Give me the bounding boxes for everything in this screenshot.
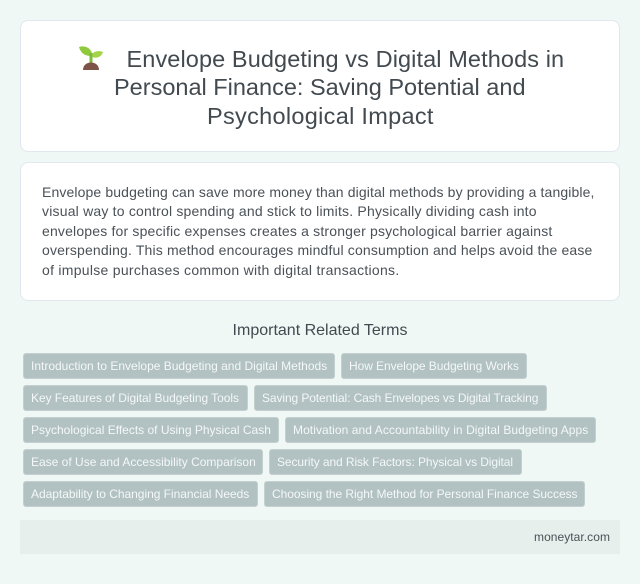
panel: summary text: envelopes for specific expenses creates a stronger psychological barrier against — [42, 223, 552, 239]
panel: term tags: Motivation and Accountability in Digital Budgeting Apps — [293, 423, 588, 437]
panel: term tags — [23, 353, 596, 507]
footer: source — [20, 520, 620, 554]
panel: summary text: overspending. This method encourages mindful consumption and helps avoid the ease — [42, 242, 592, 258]
panel: term tags: Adaptability to Changing Financial Needs — [31, 487, 249, 501]
panel: term tags: Choosing the Right Method for Personal Finance Success — [272, 487, 577, 501]
panel: summary text: Envelope budgeting can save more money than digital methods by providing a tangible, — [42, 184, 595, 200]
panel: term tags: Psychological Effects of Using Physical Cash — [31, 423, 271, 437]
icon: seedling — [79, 46, 103, 70]
panel: title card — [20, 20, 620, 152]
panel: term tags: Saving Potential: Cash Envelopes vs Digital Tracking — [262, 391, 538, 405]
panel: term tags: Ease of Use and Accessibility Comparison — [31, 455, 256, 469]
panel: term tags: How Envelope Budgeting Works — [349, 359, 519, 373]
heading: related terms: Important Related Terms — [233, 322, 407, 339]
panel: summary text: visual way to control spending and stick to limits. Physically dividing cash into — [42, 203, 537, 219]
title: Psychological Impact — [207, 103, 434, 129]
panel: term tags: Security and Risk Factors: Physical vs Digital — [277, 455, 513, 469]
panel: summary text: of impulse purchases common with digital transactions. — [42, 262, 400, 278]
panel: term tags: Key Features of Digital Budgeting Tools — [31, 391, 239, 405]
panel: term tags: Introduction to Envelope Budgeting and Digital Methods — [31, 359, 327, 373]
panel: summary text — [20, 162, 620, 301]
footer: source: moneytar.com — [534, 530, 610, 544]
title — [114, 46, 564, 129]
title: Envelope Budgeting vs Digital Methods in — [126, 46, 564, 72]
title: Personal Finance: Saving Potential and — [114, 74, 526, 100]
